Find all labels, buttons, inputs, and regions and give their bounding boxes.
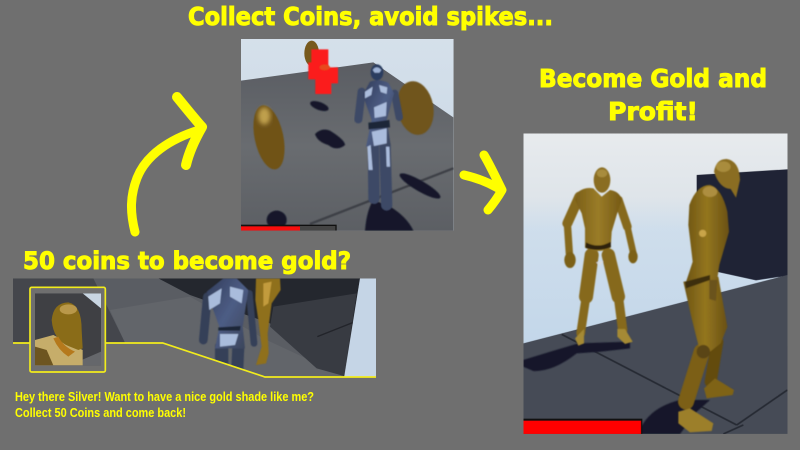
arrow: up to coins xyxy=(131,97,202,232)
portrait xyxy=(30,287,105,372)
dialogue text: Hey there Silver! Want to have a nice gold shade like me? xyxy=(15,389,314,404)
health bar xyxy=(241,225,337,231)
dark wall xyxy=(158,278,360,376)
title: become gold: Profit! xyxy=(608,97,698,126)
arrow: to gold xyxy=(464,155,502,210)
coin: left xyxy=(252,104,286,170)
dialogue text: Collect 50 Coins and come back! xyxy=(15,405,186,420)
coin: behind spike xyxy=(304,41,319,66)
character: silver xyxy=(358,64,399,205)
coin: right xyxy=(398,80,434,136)
panel: gold characters screenshot xyxy=(523,133,787,434)
character: gold near xyxy=(678,159,740,432)
title: become gold: Become Gold and xyxy=(539,64,767,93)
character: silver in scene xyxy=(203,278,254,368)
panel: dialogue screenshot xyxy=(13,278,376,378)
dialogue frame line xyxy=(13,343,376,377)
character: gold far xyxy=(564,167,638,346)
health bar xyxy=(523,419,642,434)
spikes: red cross xyxy=(308,49,338,94)
title: collect coins: Collect Coins, avoid spikes... xyxy=(188,2,553,31)
character: gold in scene xyxy=(255,278,281,365)
panel: coin collecting screenshot xyxy=(241,39,454,231)
dark block xyxy=(697,169,787,280)
title: 50 coins: 50 coins to become gold? xyxy=(23,247,351,275)
